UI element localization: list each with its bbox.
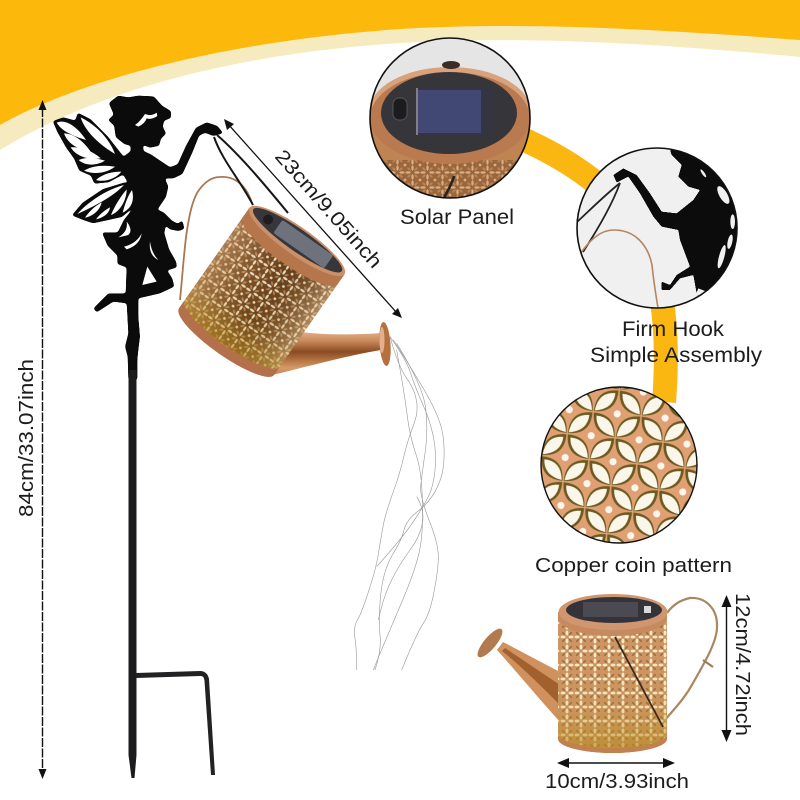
dimension: can height: 12cm/4.72inch bbox=[731, 593, 753, 736]
lid bbox=[558, 612, 667, 636]
dimension: can width bbox=[545, 758, 689, 793]
detail circle: firm hook bbox=[576, 147, 738, 309]
leg gap bbox=[142, 267, 157, 285]
dimension: can height bbox=[722, 593, 753, 742]
stake bbox=[128, 370, 136, 778]
copper handle wire bbox=[180, 177, 252, 300]
detail circle: solar panel bbox=[369, 38, 531, 200]
spout bbox=[497, 642, 560, 722]
wing cells and dress details bbox=[57, 113, 158, 260]
label: solar panel: Solar Panel bbox=[400, 206, 514, 229]
label: firm hook, simple assembly: Simple Assembly bbox=[590, 344, 763, 367]
copper handle bbox=[580, 230, 658, 308]
can body bbox=[171, 196, 353, 386]
hook wires bbox=[577, 183, 620, 252]
dimension: overall height bbox=[16, 100, 46, 779]
can body bbox=[558, 612, 667, 753]
spout bbox=[268, 332, 381, 376]
detail circle: copper coin pattern bbox=[541, 387, 697, 543]
switch bbox=[393, 98, 407, 120]
top banner: yellow wave with cream edge bbox=[0, 0, 800, 150]
dimension: can length bbox=[224, 119, 402, 318]
bail wire bbox=[615, 637, 663, 727]
wing openings bbox=[695, 169, 735, 297]
lattice band under rim bbox=[371, 125, 529, 198]
label: firm hook, simple assembly: Firm Hook bbox=[622, 318, 725, 341]
label: copper coin pattern: Copper coin pattern bbox=[535, 554, 732, 577]
small watering can bbox=[474, 594, 717, 753]
stake foot prong bbox=[136, 671, 215, 775]
copper rim bbox=[371, 67, 529, 111]
connector: yellow band linking the detail circles bbox=[525, 140, 666, 402]
hanging wires bbox=[214, 135, 288, 213]
dimension: can width: 10cm/3.93inch bbox=[545, 771, 689, 793]
knob bbox=[442, 61, 460, 69]
solar cell bbox=[417, 88, 493, 135]
dimension: can length: 23cm/9.05inch bbox=[270, 146, 386, 273]
string lights falling from spout bbox=[355, 337, 444, 670]
main watering can bbox=[171, 135, 392, 386]
dark lid bbox=[381, 72, 517, 154]
black silhouette bbox=[54, 97, 222, 380]
dimension: overall height: 84cm/33.07inch bbox=[16, 359, 38, 517]
label: firm hook, simple assembly bbox=[590, 318, 763, 367]
arm and body silhouette bbox=[614, 150, 736, 296]
fairy stake silhouette bbox=[54, 97, 222, 778]
handle bbox=[665, 598, 717, 720]
